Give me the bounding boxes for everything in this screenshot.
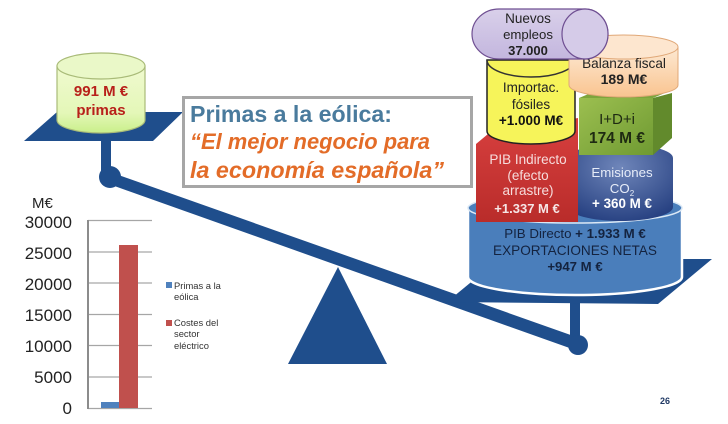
cube: I+D+i: 174 M € bbox=[589, 130, 645, 147]
bar chart: 20000 bbox=[25, 275, 72, 294]
legend bbox=[166, 280, 222, 351]
cylinder: emisiones CO2 bbox=[568, 144, 673, 221]
box: PIB indirecto: PIB Indirecto bbox=[489, 152, 567, 167]
cube: I+D+i: I+D+i bbox=[599, 111, 635, 128]
bar chart: 0 bbox=[63, 399, 72, 418]
bar: costes bbox=[119, 245, 138, 408]
fulcrum triangle bbox=[288, 267, 387, 364]
cylinder: emisiones CO2: CO bbox=[610, 181, 630, 196]
horizontal cylinder: nuevos empleos bbox=[472, 9, 608, 59]
legend: Primas a la bbox=[174, 280, 222, 291]
page number: 26 bbox=[660, 396, 670, 406]
cylinder: PIB directo: PIB Directo + 1.933 M € bbox=[504, 226, 646, 241]
cylinder: balanza fiscal bbox=[569, 35, 678, 97]
cylinder: emisiones CO2: + 360 M € bbox=[592, 196, 653, 211]
legend: eólica bbox=[174, 291, 199, 302]
cylinder: 991 M€ primas: primas bbox=[76, 102, 126, 119]
cylinder: emisiones CO2: Emisiones bbox=[591, 165, 653, 180]
cylinder: importaciones fósiles: Importac. bbox=[503, 80, 559, 95]
title box: Primas a la eólica: bbox=[190, 101, 392, 127]
bar chart: 25000 bbox=[25, 244, 72, 263]
bar chart: 10000 bbox=[25, 337, 72, 356]
bar chart: 5000 bbox=[34, 368, 72, 387]
box: PIB indirecto bbox=[476, 118, 578, 222]
cylinder: importaciones fósiles bbox=[487, 60, 575, 144]
cylinder: importaciones fósiles: +1.000 M€ bbox=[499, 113, 564, 128]
box: PIB indirecto: +1.337 M € bbox=[494, 201, 560, 216]
cylinder: emisiones CO2: 2 bbox=[630, 189, 635, 198]
cylinder: 991 M€ primas bbox=[57, 53, 145, 133]
cylinder: PIB directo: +947 M € bbox=[547, 259, 603, 274]
balance beam bbox=[99, 138, 588, 355]
cylinder: 991 M€ primas: 991 M € bbox=[74, 83, 129, 100]
horizontal cylinder: nuevos empleos: empleos bbox=[503, 27, 553, 42]
legend: sector bbox=[174, 328, 200, 339]
right platform bbox=[447, 259, 712, 304]
cube: I+D+i bbox=[579, 90, 672, 155]
horizontal cylinder: nuevos empleos: 37.000 bbox=[508, 43, 548, 58]
bar: primas bbox=[101, 402, 119, 408]
y axis unit: M€ bbox=[32, 195, 53, 212]
title box bbox=[184, 98, 472, 186]
cylinder: balanza fiscal: Balanza fiscal bbox=[582, 56, 666, 71]
box: PIB indirecto: (efecto bbox=[507, 168, 549, 183]
cylinder: balanza fiscal: 189 M€ bbox=[601, 71, 648, 87]
box: PIB indirecto: arrastre) bbox=[502, 183, 554, 198]
cylinder: importaciones fósiles: fósiles bbox=[512, 97, 550, 112]
bar chart: 15000 bbox=[25, 306, 72, 325]
horizontal cylinder: nuevos empleos: Nuevos bbox=[505, 11, 551, 26]
title box: la economía española” bbox=[190, 157, 445, 183]
cylinder: PIB directo: EXPORTACIONES NETAS bbox=[493, 243, 657, 258]
legend: Costes del bbox=[174, 317, 218, 328]
bar chart bbox=[25, 195, 222, 418]
bar chart: 30000 bbox=[25, 213, 72, 232]
cylinder: PIB directo bbox=[468, 193, 682, 295]
left platform bbox=[24, 112, 183, 141]
title box: “El mejor negocio para bbox=[190, 129, 430, 154]
legend: eléctrico bbox=[174, 340, 209, 351]
